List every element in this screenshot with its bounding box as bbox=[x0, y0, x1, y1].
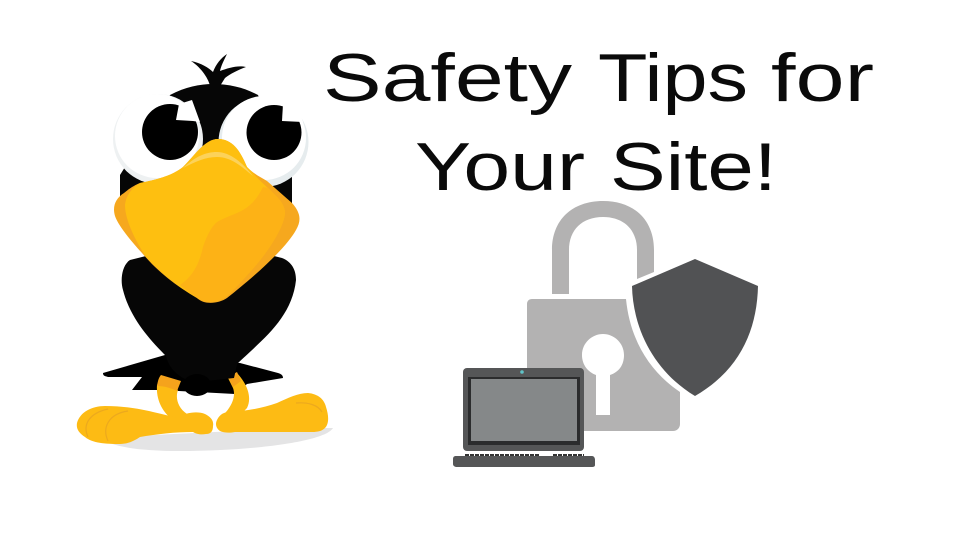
laptop camera bbox=[520, 370, 524, 374]
bird left foot bbox=[77, 406, 213, 444]
title line 2: Site! bbox=[610, 129, 777, 205]
title line 2: Your bbox=[415, 129, 585, 205]
icon: cartoon bird mascot bbox=[77, 54, 333, 451]
bird belly tip bbox=[183, 374, 211, 396]
padlock body with keyhole bbox=[527, 299, 680, 431]
icon: shield bbox=[632, 259, 758, 396]
icon: padlock bbox=[527, 201, 680, 431]
right eye bbox=[218, 96, 308, 187]
title line 1: for bbox=[771, 40, 874, 116]
laptop keys bbox=[465, 454, 584, 456]
padlock shackle bbox=[552, 201, 654, 294]
ground shadow bbox=[100, 428, 333, 451]
bird right foot bbox=[216, 393, 328, 433]
bird legs bbox=[157, 372, 249, 421]
icon: laptop bbox=[453, 368, 595, 467]
bird tail feathers bbox=[103, 355, 283, 394]
laptop screen bbox=[468, 377, 580, 445]
bird beak bbox=[114, 139, 299, 303]
bird head bbox=[120, 84, 292, 225]
title line 2 bbox=[415, 129, 777, 205]
left eye bbox=[113, 94, 203, 184]
foot toe lines bbox=[86, 403, 322, 441]
bird body bbox=[122, 240, 296, 382]
head crest feathers bbox=[191, 54, 246, 86]
title bbox=[323, 40, 874, 205]
title line 1: Safety bbox=[323, 40, 572, 116]
title line 1: Tips bbox=[598, 40, 748, 116]
title line 1 bbox=[323, 40, 874, 116]
laptop lid bbox=[463, 368, 584, 451]
laptop keyboard base bbox=[453, 456, 595, 467]
